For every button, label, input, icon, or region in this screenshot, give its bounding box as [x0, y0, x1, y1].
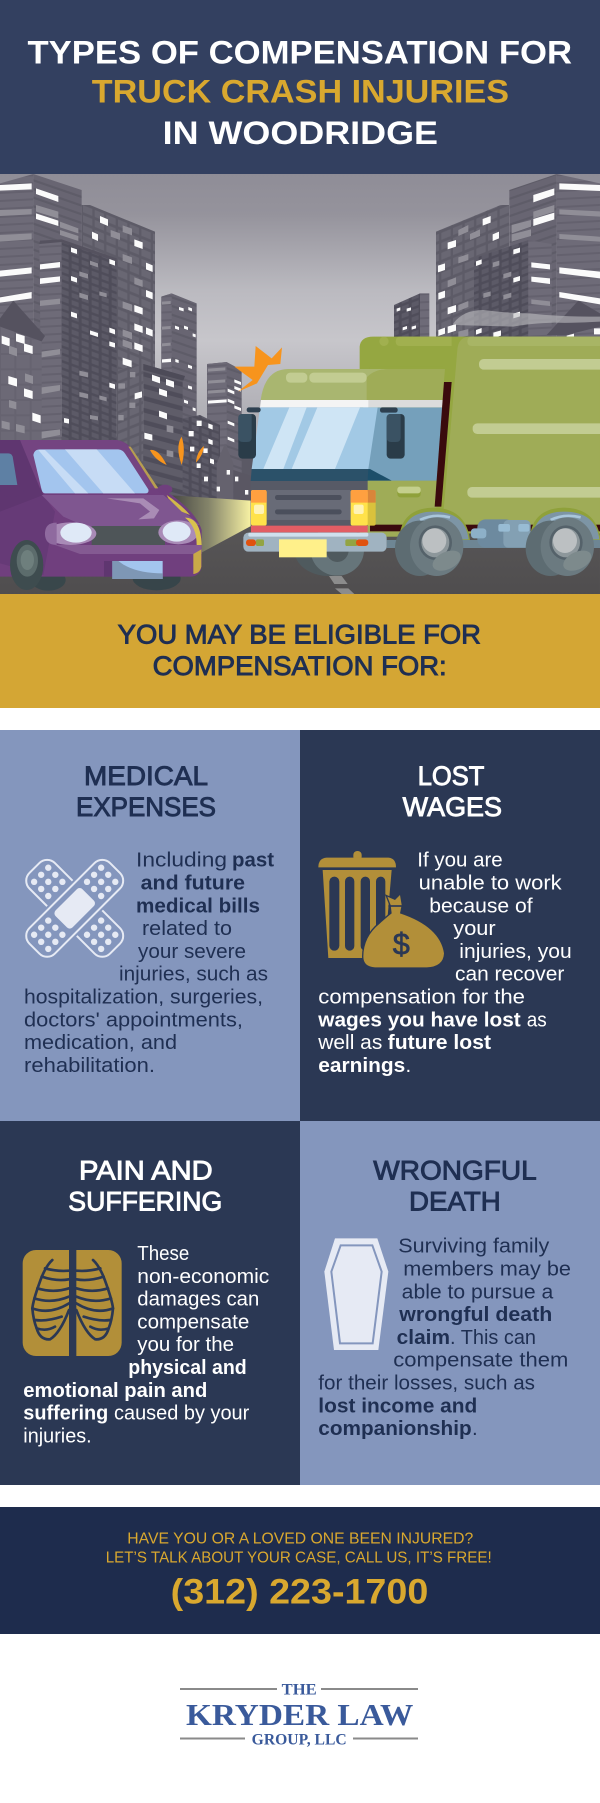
- body text: pain and suffering: compensate: [137, 1310, 249, 1333]
- body text: pain and suffering: injuries.: [23, 1424, 92, 1447]
- gold banner: [0, 594, 600, 708]
- right headlamp: [351, 490, 376, 526]
- body text: medical expenses: past: [232, 849, 274, 872]
- banner text: COMPENSATION FOR:: [153, 651, 447, 681]
- buildings on the left: [0, 174, 257, 507]
- road: [0, 500, 600, 597]
- body text: wrongful death: Surviving family: [398, 1235, 550, 1258]
- body text: lost wages: wages you have lost: [317, 1008, 521, 1031]
- heading: pain and suffering: [68, 1155, 222, 1216]
- heading: pain and suffering: SUFFERING: [68, 1186, 222, 1216]
- body text: medical expenses: your severe: [138, 940, 246, 963]
- body text: medical expenses: related to: [142, 917, 232, 940]
- body text: pain and suffering: suffering: [23, 1402, 108, 1425]
- heading: wrongful death: WRONGFUL: [373, 1155, 537, 1185]
- impact sparks: [150, 437, 204, 465]
- body text: lost wages: compensation for the: [318, 986, 525, 1008]
- rear wheel 2: [526, 508, 600, 576]
- rear wheel 1: [395, 508, 470, 576]
- header panel: [0, 0, 600, 174]
- body text: wrongful death: able to pursue a: [402, 1280, 554, 1303]
- heading: medical expenses: MEDICAL: [84, 761, 208, 791]
- headlight beam: [172, 496, 251, 552]
- body text: lost wages: can recover: [455, 963, 564, 986]
- panel: wrongful death: [300, 1121, 600, 1485]
- body text: medical expenses: hospitalization, surgeries,: [24, 986, 263, 1008]
- grey lit windows: [0, 205, 225, 457]
- truck cargo body: [360, 336, 600, 576]
- body text: medical expenses: injuries, such as: [119, 963, 268, 986]
- heading: pain and suffering: PAIN AND: [79, 1155, 213, 1185]
- heading: wrongful death: DEATH: [409, 1186, 501, 1216]
- body text: wrongful death: for their losses, such as: [318, 1372, 535, 1394]
- body text: wrongful death: . This can: [450, 1326, 536, 1349]
- heading: wrongful death: [373, 1155, 537, 1216]
- body text: medical expenses: medical bills: [136, 894, 260, 917]
- icon: money bag and trash can: [318, 851, 444, 967]
- purple car: [0, 440, 202, 591]
- illustration: truck and car crash in city street: [0, 174, 600, 597]
- body text: wrongful death: compensate them: [393, 1349, 568, 1372]
- icon: rib cage: [23, 1248, 122, 1358]
- panel: pain and suffering: [0, 1121, 300, 1485]
- logo: The Kryder Law Group, LLC: THE: [282, 1681, 317, 1698]
- heading: medical expenses: [76, 761, 216, 822]
- buildings on the right: [394, 174, 600, 340]
- body text: lost wages: future lost: [388, 1031, 491, 1054]
- call to action text: [106, 1530, 492, 1566]
- body text: medical expenses: [24, 849, 274, 1077]
- body text: lost wages: your: [453, 917, 496, 940]
- logo: The Kryder Law Group, LLC: KRYDER LAW: [186, 1697, 413, 1732]
- body text: pain and suffering: non-economic: [137, 1265, 269, 1288]
- body text: wrongful death: lost income and: [318, 1394, 477, 1417]
- banner text: [118, 619, 481, 681]
- body text: medical expenses: medication, and: [24, 1031, 177, 1054]
- body text: lost wages: injuries, you: [459, 940, 572, 963]
- title: TYPES OF COMPENSATION FOR: [28, 34, 572, 70]
- road lane markings: [329, 576, 354, 594]
- exhaust smoke: [453, 310, 600, 327]
- title: [28, 34, 572, 151]
- body text: lost wages: well as: [317, 1031, 382, 1054]
- icon: crossed bandages: [17, 851, 132, 966]
- body text: pain and suffering: emotional pain and: [23, 1379, 207, 1402]
- truck cab front: [238, 369, 387, 576]
- body text: wrongful death: companionship: [318, 1417, 472, 1440]
- body text: wrongful death: .: [472, 1417, 478, 1440]
- body text: wrongful death: [318, 1235, 571, 1440]
- heading: lost wages: LOST: [418, 761, 484, 791]
- icon: coffin: [324, 1238, 388, 1350]
- bumper: [243, 533, 387, 552]
- call to action footer: [0, 1507, 600, 1634]
- heading: lost wages: WAGES: [403, 792, 502, 822]
- logo: The Kryder Law Group, LLC: [180, 1681, 418, 1748]
- heading: medical expenses: EXPENSES: [76, 792, 216, 822]
- panel: lost wages: [300, 730, 600, 1121]
- call to action text: LET’S TALK ABOUT YOUR CASE, CALL US, IT’S FREE!: [106, 1549, 492, 1566]
- truck cab side: [360, 369, 445, 537]
- call to action text: HAVE YOU OR A LOVED ONE BEEN INJURED?: [127, 1530, 473, 1547]
- body text: medical expenses: rehabilitation.: [24, 1054, 155, 1077]
- logo: The Kryder Law Group, LLC: GROUP, LLC: [252, 1731, 347, 1748]
- body text: lost wages: [317, 849, 572, 1077]
- body text: pain and suffering: you for the: [137, 1333, 234, 1356]
- panel: medical expenses: [0, 730, 300, 1121]
- licence plate: [279, 539, 327, 557]
- body text: pain and suffering: damages can: [137, 1288, 259, 1311]
- impact starburst: [234, 346, 282, 392]
- white lit windows: [0, 183, 248, 495]
- body text: wrongful death: claim: [397, 1326, 450, 1349]
- body text: lost wages: earnings: [318, 1054, 405, 1077]
- body text: lost wages: because of: [429, 894, 533, 917]
- icon: money bag and trash can: $: [393, 928, 410, 962]
- banner text: YOU MAY BE ELIGIBLE FOR: [118, 619, 481, 649]
- body text: lost wages: If you are: [417, 849, 503, 872]
- body text: pain and suffering: [23, 1242, 269, 1447]
- underbody frame and fuel tank: [370, 525, 600, 531]
- body text: medical expenses: Including: [136, 849, 227, 872]
- title: TRUCK CRASH INJURIES: [92, 74, 509, 110]
- body text: wrongful death: wrongful death: [398, 1303, 552, 1326]
- body text: medical expenses: doctors' appointments,: [24, 1008, 243, 1031]
- body text: pain and suffering: caused by your: [114, 1402, 249, 1425]
- heading: lost wages: [403, 761, 502, 822]
- title: IN WOODRIDGE: [163, 115, 438, 151]
- body text: medical expenses: and future: [141, 872, 245, 894]
- body text: wrongful death: members may be: [403, 1258, 571, 1280]
- body text: pain and suffering: These: [137, 1242, 189, 1265]
- phone number: (312) 223-1700: [171, 1572, 428, 1611]
- body text: pain and suffering: physical and: [128, 1356, 247, 1379]
- body text: lost wages: unable to work: [419, 872, 562, 894]
- body text: lost wages: .: [406, 1054, 411, 1077]
- left headlamp: [251, 490, 267, 526]
- body text: lost wages: as: [527, 1008, 547, 1031]
